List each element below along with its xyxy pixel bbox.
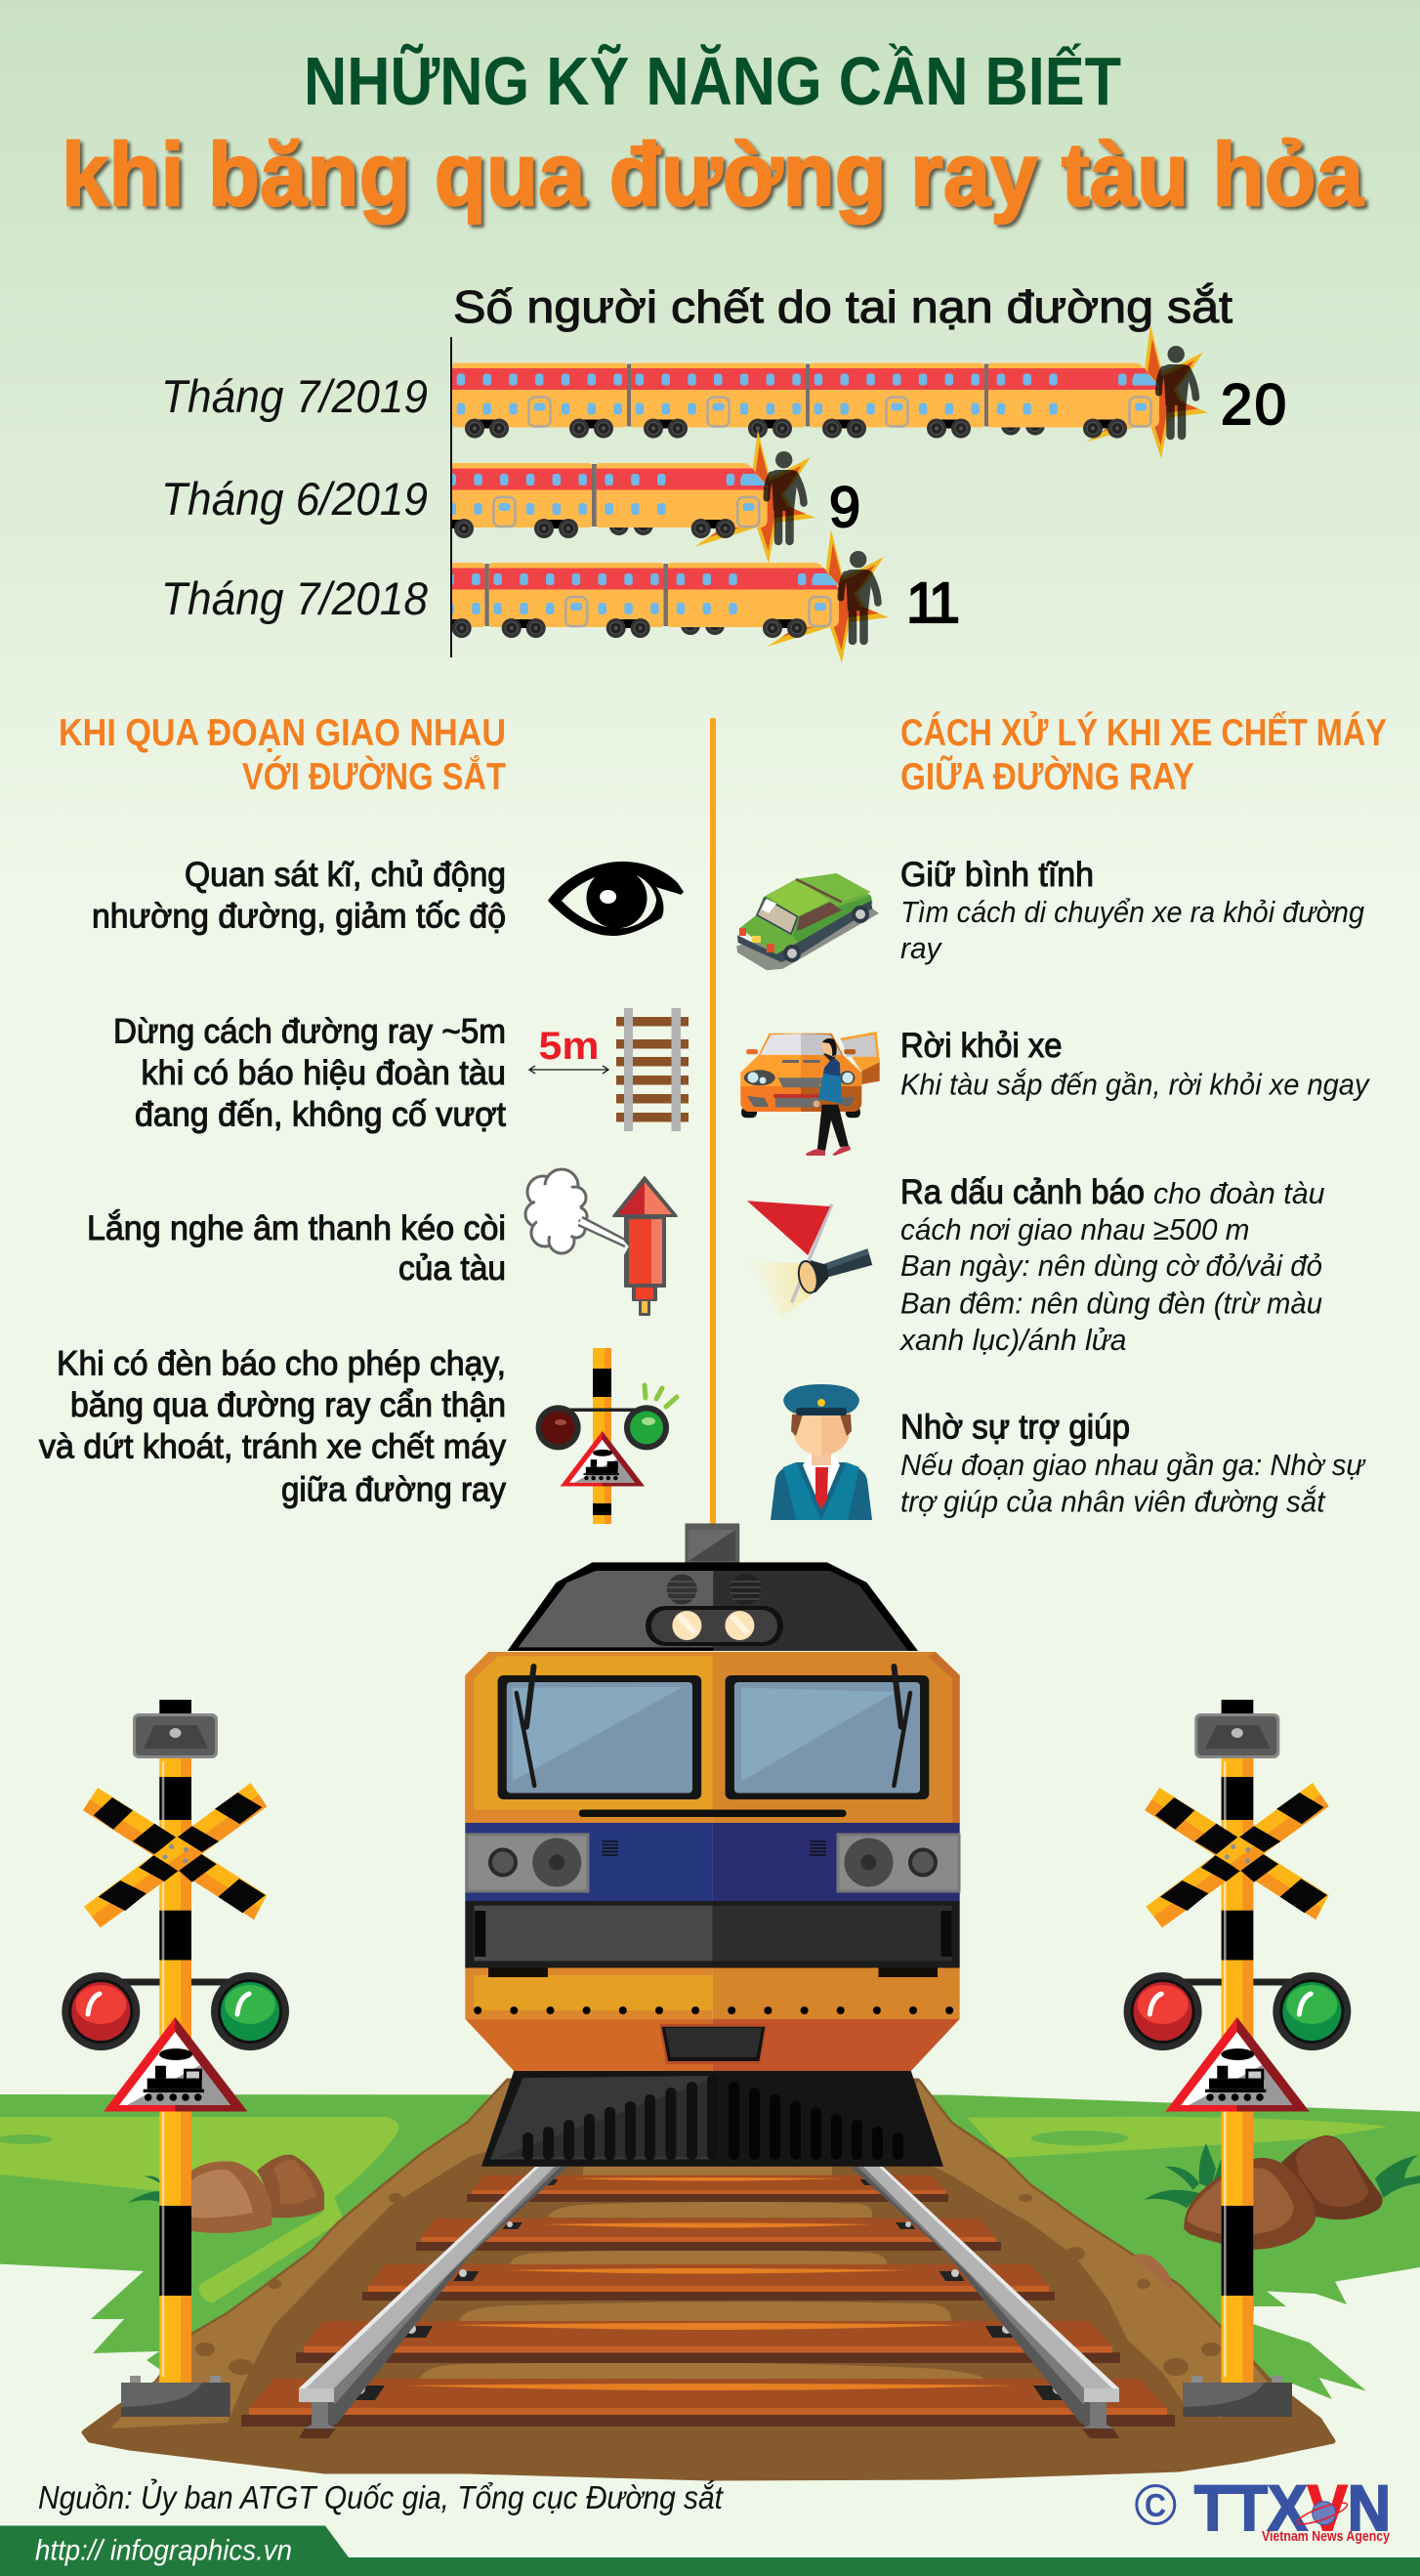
panel: left column <box>39 712 689 1524</box>
warning triangle sign <box>104 2017 247 2112</box>
chart axis <box>450 337 452 657</box>
text: cross when signal allows <box>39 1344 506 1508</box>
left heading: VỚI ĐƯỜNG SẮT <box>242 755 506 798</box>
pole base <box>121 2376 230 2417</box>
text: ask for help: Nếu đoạn giao nhau gần ga: Nhờ sự <box>900 1448 1366 1482</box>
ground: embankment <box>84 2081 1333 2478</box>
value numbers: 20 <box>1221 373 1286 437</box>
copyright mark: C <box>1145 2487 1166 2523</box>
text: stop 5m <box>113 1012 506 1133</box>
text: warning signal: Ban đêm: nên dùng đèn (trừ màu <box>900 1286 1322 1321</box>
icon: horn with sound cloud <box>525 1169 677 1315</box>
ballast patches <box>420 2167 983 2379</box>
train bar 7/2019: 20 <box>452 324 1208 459</box>
title line 2: khi băng qua đường ray tàu hỏa <box>62 125 1364 225</box>
icon: railway officer <box>771 1384 872 1520</box>
text: cross when signal allows: giữa đường ray <box>281 1471 506 1508</box>
title <box>62 43 1364 225</box>
right heading: GIỮA ĐƯỜNG RAY <box>900 755 1194 798</box>
signal bar <box>122 1979 229 1985</box>
value numbers <box>829 373 1286 635</box>
text: observe: nhường đường, giảm tốc độ <box>92 897 506 936</box>
center plate <box>154 1837 202 1871</box>
text: leave the car <box>900 1027 1371 1102</box>
text: cross when signal allows: Khi có đèn báo cho phép chạy, <box>57 1344 506 1383</box>
bottom orange panel <box>465 2019 960 2071</box>
wipers <box>517 1667 910 1786</box>
crossing signal: left <box>62 1700 289 2417</box>
speaker <box>133 1713 218 1758</box>
left heading: KHI QUA ĐOẠN GIAO NHAU <box>59 712 506 754</box>
text: warning signal: xanh lục)/ánh lửa <box>898 1323 1127 1357</box>
row labels: Tháng 7/2018 <box>161 572 428 624</box>
pole <box>159 1700 191 2383</box>
text: stay calm: Giữ bình tĩnh <box>900 856 1094 894</box>
lower orange band <box>465 1967 960 2019</box>
text: warning signal: Ban ngày: nên dùng cờ đỏ/vải đỏ <box>900 1248 1322 1283</box>
wordmark: TTXVN <box>1194 2471 1391 2544</box>
train bar 6/2019: 9 <box>417 430 815 564</box>
car body <box>740 1034 861 1118</box>
icon: mini signal <box>536 1348 677 1524</box>
logo: TTXVN <box>1137 2471 1391 2545</box>
icon: red flag and flashlight <box>747 1201 872 1317</box>
text: listen: Lắng nghe âm thanh kéo còi <box>87 1209 506 1247</box>
track <box>616 1008 689 1131</box>
panel: deaths chart <box>161 281 1286 663</box>
text: listen <box>87 1209 506 1288</box>
text: listen: của tàu <box>398 1249 506 1288</box>
text: cross when signal allows: và dứt khoát, tránh xe chết máy <box>39 1428 506 1465</box>
roof box <box>686 1524 739 1563</box>
locomotive <box>465 1524 960 2167</box>
red flag <box>747 1201 830 1255</box>
text: stop 5m: khi có báo hiệu đoàn tàu <box>141 1054 506 1092</box>
blue band <box>465 1823 960 1901</box>
text: warning signal: cho đoàn tàu <box>1153 1176 1324 1210</box>
left heading <box>59 712 506 798</box>
footer url: http:// infographics.vn <box>35 2534 292 2567</box>
flag pole <box>792 1204 832 1302</box>
row labels <box>161 370 428 624</box>
cross sign <box>83 1783 267 1927</box>
5m label: 5m <box>539 1025 600 1068</box>
panel: right column <box>736 711 1387 1520</box>
text: ask for help: Nhờ sự trợ giúp <box>900 1409 1130 1446</box>
grass leaves <box>128 2143 1420 2208</box>
text: stop 5m: Dừng cách đường ray ~5m <box>113 1012 506 1051</box>
row labels: Tháng 7/2019 <box>161 370 428 422</box>
side lamps <box>467 1835 959 1891</box>
value numbers: 9 <box>829 476 860 539</box>
text: stop 5m: đang đến, không cố vượt <box>135 1096 506 1133</box>
center divider <box>710 718 716 1524</box>
text: leave the car: Rời khỏi xe <box>900 1027 1063 1065</box>
value numbers: 11 <box>906 571 960 635</box>
tie highlights <box>405 2177 1014 2390</box>
arm 1 <box>83 1788 267 1920</box>
windshields <box>498 1675 929 1799</box>
dark band <box>465 1901 960 1967</box>
icon: green car <box>736 873 879 970</box>
icon: 5m distance to track <box>529 1008 689 1131</box>
light beam <box>749 1262 811 1317</box>
right rail <box>851 2167 1119 2438</box>
icon: orange car with person <box>740 1032 880 1156</box>
ties <box>241 2175 1175 2427</box>
walking person <box>806 1038 851 1156</box>
text: stay calm: ray <box>900 931 943 965</box>
rocks <box>191 2135 1383 2289</box>
distance arrow <box>529 1066 608 1074</box>
title line 1: NHỮNG KỸ NĂNG CẦN BIẾT <box>304 43 1121 119</box>
green lamp <box>211 1972 289 2050</box>
chart heading: Số người chết do tai nạn đường sắt <box>453 281 1232 332</box>
crossing signal: right <box>1124 1700 1351 2417</box>
red lamp <box>62 1972 140 2050</box>
headlights <box>646 1606 783 1646</box>
cowcatcher <box>481 2071 943 2167</box>
bar <box>579 1809 847 1817</box>
train bar 7/2018: 11 <box>311 529 889 663</box>
copyright mark <box>1137 2485 1175 2524</box>
right heading <box>900 711 1387 798</box>
agency name: Vietnam News Agency <box>1262 2528 1391 2545</box>
ground: grass <box>0 2094 1420 2399</box>
left rail <box>299 2167 567 2438</box>
text: warning signal: Ra dấu cảnh báo <box>900 1173 1145 1211</box>
flashlight <box>796 1248 872 1294</box>
source note: Nguồn: Ủy ban ATGT Quốc gia, Tổng cục Đường sắt <box>38 2478 725 2515</box>
text: observe: Quan sát kĩ, chủ động <box>185 856 506 894</box>
roof <box>508 1562 918 1651</box>
footer band <box>0 2526 1420 2576</box>
text: ask for help: trợ giúp của nhân viên đường sắt <box>900 1485 1326 1518</box>
text: stay calm: Tìm cách di chuyển xe ra khỏi đường <box>900 895 1364 929</box>
text: leave the car: Khi tàu sắp đến gần, rời khỏi xe ngay <box>900 1067 1371 1102</box>
railway track <box>241 2167 1175 2438</box>
row labels: Tháng 6/2019 <box>161 473 428 525</box>
icon: eye <box>548 862 684 936</box>
arm 2 <box>84 1783 267 1927</box>
text: warning signal <box>898 1173 1324 1357</box>
upper body <box>465 1652 960 1823</box>
text: observe <box>92 856 506 936</box>
open car door <box>840 1032 880 1084</box>
text: stay calm <box>900 856 1364 965</box>
text: ask for help <box>900 1409 1366 1518</box>
text: warning signal: cách nơi giao nhau ≥500 m <box>900 1212 1250 1246</box>
text: cross when signal allows: băng qua đường ray cẩn thận <box>70 1386 506 1424</box>
